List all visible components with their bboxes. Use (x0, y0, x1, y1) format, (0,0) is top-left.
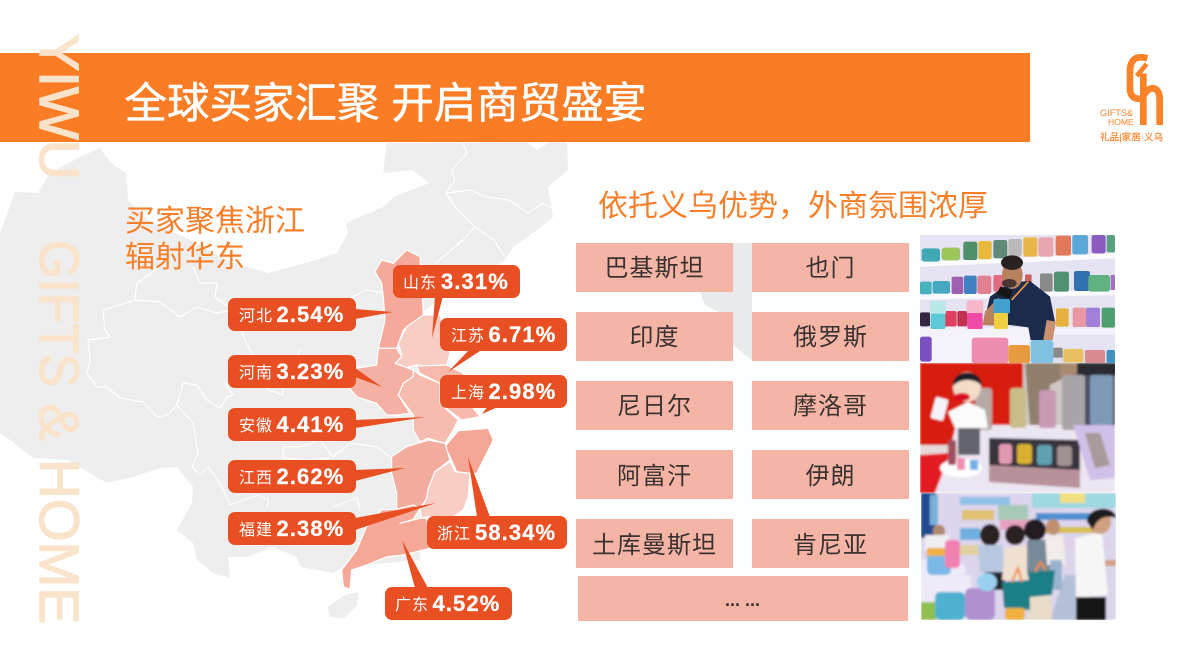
callout: Shandong: 山东 (403, 274, 437, 292)
callout: Fujian: 福建 (239, 521, 273, 539)
callout: Hebei (228, 298, 393, 331)
logo mark (1130, 57, 1160, 125)
callout: Henan: 3.23% (276, 359, 344, 384)
callout: Jiangxi: 2.62% (276, 464, 344, 489)
country: Russia (752, 312, 909, 361)
provinces highlighted on the map (342, 250, 493, 589)
country: Morocco: 摩洛哥 (793, 393, 868, 420)
country: Niger: 尼日尔 (617, 393, 692, 420)
callout: Hebei: 河北 (239, 307, 273, 325)
country: Iran: 伊朗 (806, 463, 856, 490)
right heading: 依托义乌优势，外商氛围浓厚 (598, 190, 988, 223)
callout: Guangdong: 广东 (395, 596, 429, 614)
banner (0, 53, 1030, 142)
callout: Jiangsu (440, 318, 567, 372)
callout: Jiangsu: 6.71% (488, 322, 556, 347)
vertical watermark YIWU GIFTS & HOME (28, 34, 91, 624)
country: Kenya: 肯尼亚 (793, 532, 868, 559)
callout: Shanghai: 2.98% (488, 379, 556, 404)
province: Jiangxi (392, 440, 450, 509)
country: Iran (752, 450, 909, 499)
callout: Shanghai: 上海 (451, 384, 485, 402)
more countries (578, 576, 908, 621)
province: Zhejiang (445, 428, 493, 473)
province: Hebei (375, 250, 423, 348)
callout: Jiangxi (228, 460, 405, 493)
country: Russia: 俄罗斯 (793, 324, 868, 351)
callout: Shanghai (440, 375, 567, 414)
left heading: 辐射华东 (125, 241, 245, 274)
country grid (576, 243, 920, 622)
callout: Zhejiang: 浙江 (437, 525, 471, 543)
vertical watermark YIWU GIFTS & HOME: YIWU (28, 34, 91, 180)
photo: buyer at lunchbox shelves (920, 235, 1115, 364)
callout: Anhui (228, 408, 426, 441)
logo wordmark line 2: HOME (1108, 117, 1134, 127)
province: Shandong (395, 315, 450, 370)
province: Fujian (420, 462, 470, 518)
more countries: ... ... (725, 590, 760, 610)
photo: mascot figure and gift box (920, 363, 1117, 493)
title: 全球买家汇聚 开启商贸盛宴 (124, 81, 646, 128)
callout: Guangdong (385, 540, 512, 620)
callout: Shandong: 3.31% (441, 269, 509, 294)
province: Guangdong (342, 505, 430, 589)
vertical watermark YIWU GIFTS & HOME: HOME (28, 459, 91, 624)
country: Morocco (752, 381, 909, 430)
callout: Hebei: 2.54% (276, 302, 344, 327)
country: Yemen (752, 243, 909, 292)
callout: Guangdong: 4.52% (432, 591, 500, 616)
country: India: 印度 (630, 324, 680, 351)
province: Henan (348, 348, 413, 415)
country: Niger (576, 381, 733, 430)
left heading: 买家聚焦浙江 (125, 205, 305, 238)
grey background map of China (0, 142, 752, 618)
callout: Jiangsu: 江苏 (451, 327, 485, 345)
vertical watermark YIWU GIFTS & HOME: & (28, 403, 91, 441)
country: Afghanistan: 阿富汗 (617, 463, 692, 490)
photo: visitors in booth (910, 493, 1116, 620)
country: Yemen: 也门 (806, 255, 856, 282)
country: Turkmenistan (576, 519, 733, 568)
country: Turkmenistan: 土库曼斯坦 (592, 532, 717, 559)
country: Pakistan: 巴基斯坦 (604, 255, 704, 282)
callout: Henan: 河南 (239, 364, 273, 382)
province: Anhui (398, 370, 458, 443)
callout: Fujian: 2.38% (276, 516, 344, 541)
callout: Fujian (228, 503, 436, 545)
country: Kenya (752, 519, 909, 568)
vertical watermark YIWU GIFTS & HOME: GIFTS (28, 240, 91, 387)
callout: Shandong (393, 265, 520, 338)
callout: Anhui: 4.41% (276, 412, 344, 437)
left heading (125, 205, 305, 274)
callout: Zhejiang: 58.34% (475, 520, 556, 545)
country: Pakistan (576, 243, 733, 292)
logo chinese: 礼品|家居·义乌 (1100, 132, 1163, 144)
logo (1100, 57, 1163, 144)
province: Jiangsu (417, 365, 480, 420)
country: India (576, 312, 733, 361)
callout: Anhui: 安徽 (239, 417, 273, 435)
callout: Zhejiang (427, 457, 567, 549)
logo wordmark: GIFTS& (1100, 108, 1133, 118)
callout: Henan (228, 355, 382, 388)
callout: Jiangxi: 江西 (239, 469, 273, 487)
country: Afghanistan (576, 450, 733, 499)
